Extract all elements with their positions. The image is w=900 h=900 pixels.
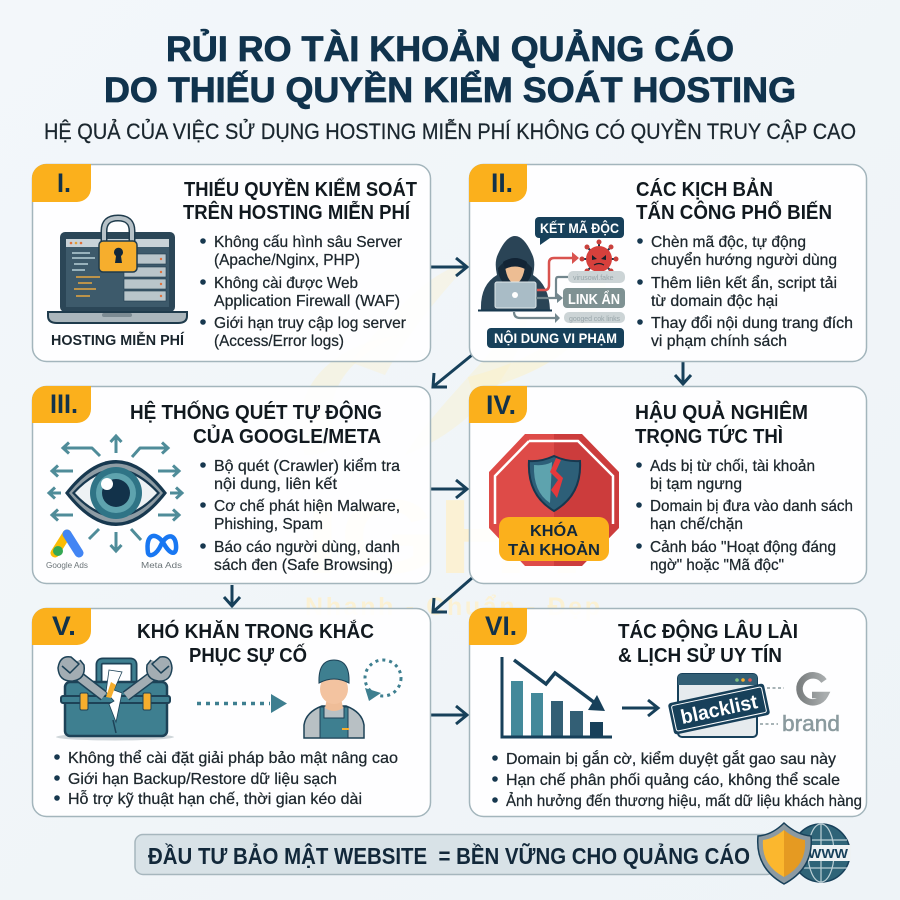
bullet list: Giới hạn truy cập log server [214,315,407,332]
callout: ket ma doc: KẾT MÃ ĐỘC [540,219,619,236]
pill: noi dung vi pham: NỘI DUNG VI PHẠM [494,329,617,346]
bullet list: vi phạm chính sách [651,333,787,350]
heading [636,178,832,224]
heading [137,619,374,667]
bullet list: Domain bị đưa vào danh sách [650,498,853,515]
label: khoa tai khoan: KHÓA [530,522,578,540]
arrow [622,700,658,716]
logo: Meta Ads: Meta Ads [141,561,182,570]
label: brand: brand [782,711,840,736]
title: DO THIẾU QUYỀN KIỂM SOÁT HOSTING [104,70,796,110]
bullet list: Phishing, Spam [214,516,323,533]
heading: TRÊN HOSTING MIỄN PHÍ [183,200,411,224]
bullet list: Không cài được Web [214,275,358,292]
bullet list: ngờ" hoặc "Mã độc" [650,557,784,574]
panel III: III. [50,389,78,419]
heading: PHỤC SỰ CỐ [189,643,307,667]
heading [130,400,382,448]
title [104,29,796,110]
bullet list: Hạn chế phân phối quảng cáo, không thể scale [506,771,840,789]
heading: HỆ THỐNG QUÉT TỰ ĐỘNG [130,400,382,424]
heading: KHÓ KHĂN TRONG KHẮC [137,619,374,643]
panel I [32,164,430,362]
bullet list: Giới hạn Backup/Restore dữ liệu sạch [68,771,337,788]
bullet list: Hỗ trợ kỹ thuật hạn chế, thời gian kéo dài [68,789,362,808]
bullet list [200,457,400,574]
panel II: II. [491,168,513,198]
panel V: V. [52,611,76,641]
dotted arrow [197,694,287,713]
watermark [300,262,605,621]
bullet list: (Apache/Nginx, PHP) [214,252,360,269]
bullet list [636,458,853,574]
arrow: IV to V [433,578,472,612]
icon: circular dotted arrow [365,660,401,701]
footer banner [135,834,775,874]
bullet list: hạn chế/chặn [650,516,743,533]
arrow: III to IV [431,480,467,498]
pill: blurred link 1: virusowl.fake [573,275,614,282]
icon: browser with blacklist stamp [668,674,770,737]
bullet list [200,234,407,350]
heading: & LỊCH SỬ UY TÍN [618,643,782,667]
bullet list: sách đen (Safe Browsing) [214,557,393,574]
bullet list: Domain bị gắn cờ, kiểm duyệt gắt gao sau này [506,749,836,768]
pill: blurred link 1 [568,271,625,283]
red arrow [537,252,579,290]
arrow: III to V [224,585,240,606]
icon: stop sign with broken shield [489,434,619,566]
heading: TÁC ĐỘNG LÂU LÀI [618,619,798,643]
bullet list: nội dung, liên kết [214,476,338,493]
icon: G logo [799,675,825,702]
heading: THIẾU QUYỀN KIỂM SOÁT [184,178,417,201]
bullet list: Thêm liên kết ẩn, script tải [651,274,837,292]
footer banner: ĐẦU TƯ BẢO MẬT WEBSITE = BỀN VỮNG CHO QUẢNG CÁO [148,841,750,869]
logo: Google Ads: Google Ads [46,561,88,570]
bullet list: (Access/Error logs) [214,333,344,350]
icon: hacker [478,236,552,310]
watermark: IGHT [305,478,605,596]
icon: globe www: WWW [808,846,849,861]
arrow: II to III [433,355,472,387]
heading [618,619,798,667]
icon: virus [580,240,618,278]
grey connector arrows [514,277,568,323]
panel IV: IV. [486,390,516,420]
heading: CÁC KỊCH BẢN [636,178,773,201]
bullet list: bị tạm ngưng [650,476,742,493]
bullet list: Ads bị từ chối, tài khoản [650,458,815,475]
panel V [32,608,430,816]
pill: blurred link 2: googed cok links [569,316,620,323]
watermark: Nhanh - Chuẩn - Đẹp [305,593,600,621]
panel VI: VI. [485,611,517,641]
bullet list: Chèn mã độc, tự động [651,234,806,251]
icon: browser with blacklist stamp: blacklist [679,691,760,729]
bullet list: Application Firewall (WAF) [214,293,400,310]
panel IV [469,386,866,584]
icon: technician [304,660,364,738]
bullet list: từ domain độc hại [651,293,778,310]
arrow: II to IV [675,362,691,384]
arrow: V to VI [431,706,467,724]
panel VI [469,608,866,816]
chart: falling bars [502,657,612,737]
panel III [32,386,430,584]
label: khoa tai khoan [499,517,609,561]
icon: eye with scanning arrows [49,436,182,551]
label: khoa tai khoan: TÀI KHOẢN [508,542,600,559]
heading: HẬU QUẢ NGHIÊM [635,400,808,424]
bullet list: Báo cáo người dùng, danh [214,539,400,556]
bullet list: Ảnh hưởng đến thương hiệu, mất dữ liệu khách hàng [506,791,862,810]
bullet list: Cảnh báo "Hoạt động đáng [650,539,836,556]
pill: blurred link 2 [564,312,625,323]
icon: laptop with padlock [48,218,187,323]
bullet list: chuyển hướng người dùng [651,251,837,269]
label: hosting: HOSTING MIỄN PHÍ [51,332,185,349]
callout: ket ma doc [535,217,624,245]
panel II [469,164,866,362]
icon: globe www [792,824,851,882]
title: RỦI RO TÀI KHOẢN QUẢNG CÁO [166,29,734,69]
panel I: I. [57,168,71,198]
pill: link an: LINK ẨN [568,290,620,308]
bullet list: Không thể cài đặt giải pháp bảo mật nâng cao [68,749,398,767]
heading: CỦA GOOGLE/META [193,424,381,448]
logo: Google Ads [46,534,88,570]
arrow: I to II [431,258,467,276]
icon: broken toolbox [56,657,174,740]
icon: shield [758,823,811,884]
bullet list: Cơ chế phát hiện Malware, [214,498,400,515]
bullet list [54,749,398,808]
dotted pointers [760,688,784,724]
logo: Meta Ads [141,536,182,570]
heading [635,400,808,448]
bullet list: Không cấu hình sâu Server [214,234,403,251]
heading: TRỌNG TỨC THÌ [635,424,783,448]
heading [183,178,417,224]
bullet list [492,749,862,810]
bullet list: Bộ quét (Crawler) kiểm tra [214,457,400,475]
heading: TẤN CÔNG PHỔ BIẾN [636,200,832,224]
bullet list [637,234,853,350]
bullet list: Thay đổi nội dung trang đích [651,314,853,332]
